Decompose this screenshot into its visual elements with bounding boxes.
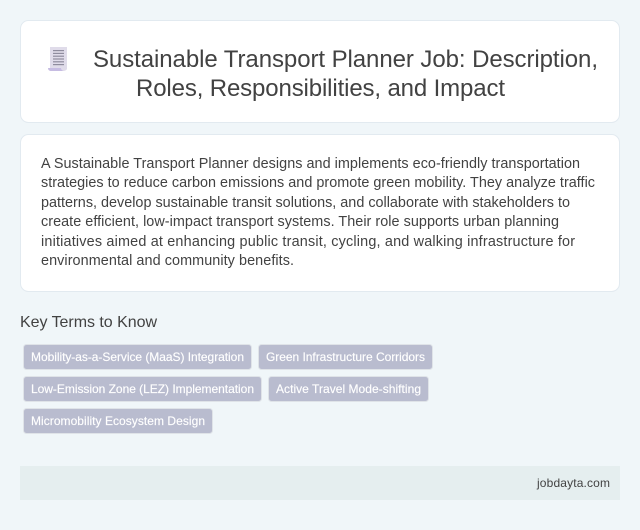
heading: key terms: Key Terms to Know [20,314,157,331]
description text: create efficient, low-impact transport systems. Their role supports urban planning [41,214,559,230]
tag: LEZ implementation: Low-Emission Zone (LEZ) Implementation [31,382,254,396]
panel: title header [20,20,620,122]
description text: initiatives aimed at enhancing public transit, cycling, and walking infrastructure for [41,234,575,250]
tag: micromobility [24,408,212,434]
title text: Roles, Responsibilities, and Impact [136,75,505,102]
description text [41,156,595,269]
description text: strategies to reduce carbon emissions and promote green mobility. They analyze traffic [41,175,595,191]
title text: Sustainable Transport Planner Job: Description, [93,46,598,73]
title text [93,46,598,102]
description text: patterns, develop sustainable transit solutions, and collaborate with stakeholders to [41,195,570,211]
footer bar [20,466,620,500]
tag: MaaS integration [24,344,252,370]
tag: green infrastructure [258,344,432,370]
icon: document scroll [48,47,67,71]
tag: active travel [268,376,428,402]
tag: LEZ implementation [24,376,262,402]
tag: MaaS integration: Mobility-as-a-Service (MaaS) Integration [31,350,244,364]
panel: description [20,134,620,292]
description text: environmental and community benefits. [41,253,294,269]
tag: micromobility: Micromobility Ecosystem Design [31,414,205,428]
description text: A Sustainable Transport Planner designs and implements eco-friendly transportation [41,156,580,172]
tag: active travel: Active Travel Mode-shifting [276,382,421,396]
tag: green infrastructure: Green Infrastructure Corridors [266,350,425,364]
footer bar: jobdayta.com [536,476,610,490]
